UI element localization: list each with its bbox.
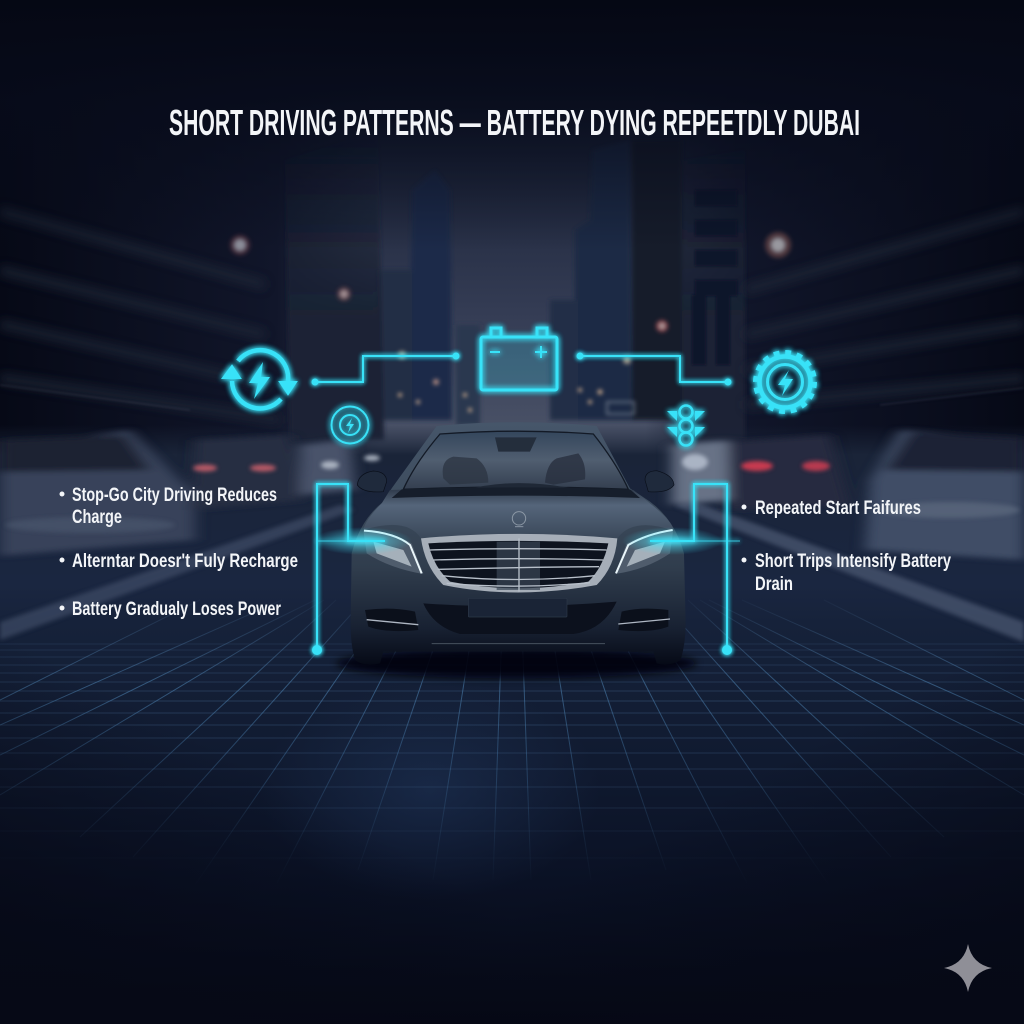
- bullet: stop-go: Charge: [72, 507, 122, 528]
- icon: recycle charge: [223, 350, 296, 408]
- emblem: [512, 512, 526, 527]
- fog vents: [365, 609, 670, 644]
- icon: gear charge: [756, 353, 814, 411]
- bullet: battery: Battery Gradualy Loses Power: [72, 599, 281, 620]
- city background: [0, 0, 1024, 480]
- headlight glow: [312, 527, 722, 555]
- road: [0, 425, 1024, 625]
- right car circuit: [650, 484, 740, 655]
- car: [337, 422, 697, 678]
- windshield: [403, 431, 628, 489]
- bullet: short trips: [742, 551, 951, 595]
- number plate: [468, 598, 567, 617]
- bullet: stop-go: [60, 485, 277, 528]
- left bullet list: [60, 485, 298, 620]
- hood: [363, 487, 673, 538]
- road stripes: [0, 500, 1024, 642]
- bullet: short trips: Short Trips Intensify Battery: [755, 551, 951, 572]
- icon: small charging ring: [332, 406, 368, 444]
- top left connector: [312, 352, 460, 386]
- lower intake: [423, 602, 617, 634]
- right headlight: [615, 529, 673, 574]
- car interior: [443, 437, 585, 488]
- icon: sparkle: [944, 944, 992, 992]
- left headlight: [363, 530, 423, 574]
- icon: battery: [481, 328, 557, 390]
- right mirror: [645, 471, 674, 492]
- left car circuit: [312, 484, 385, 655]
- grille: [421, 534, 617, 592]
- bullet: start failures: Repeated Start Faifures: [755, 498, 921, 519]
- top right connector: [576, 352, 732, 386]
- floor grid: [0, 600, 1024, 1024]
- street lights bokeh: [230, 232, 791, 414]
- bullet: stop-go: Stop-Go City Driving Reduces: [72, 485, 277, 506]
- bullet: short trips: Drain: [755, 574, 793, 595]
- right bullet list: [742, 498, 951, 595]
- left mirror: [357, 471, 387, 492]
- bullet: alternator: Alterntar Doesr't Fuly Recharge: [72, 551, 298, 572]
- car body: [351, 422, 686, 664]
- blurred traffic: [0, 430, 1024, 560]
- icon: traffic light: [667, 406, 705, 446]
- connector lines: [312, 352, 740, 655]
